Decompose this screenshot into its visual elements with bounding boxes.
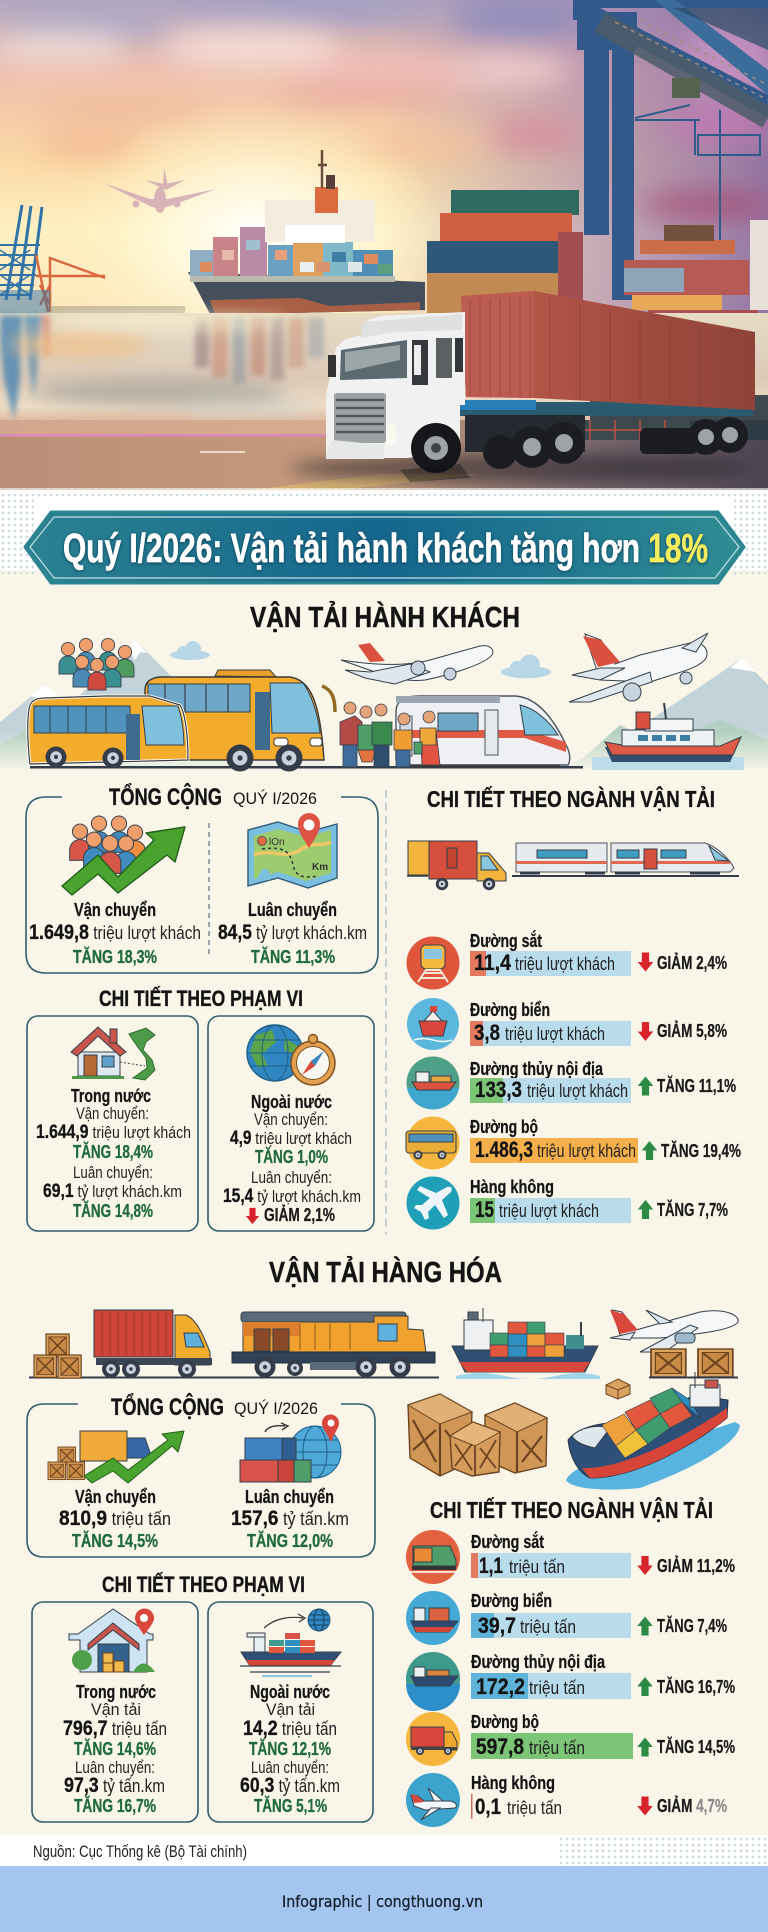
row: inland waterway: TĂNG 16,7% [657, 1676, 735, 1697]
row: aviation: 15 [475, 1197, 494, 1222]
icon: airplane large [569, 633, 708, 702]
row: rail [406, 1530, 735, 1584]
row: inland waterway: 133,3 [475, 1077, 522, 1102]
row: sea: TĂNG 7,4% [657, 1615, 727, 1636]
panel heading: TỔNG CỘNG [111, 1393, 224, 1421]
row: rail: GIẢM 11,2% [657, 1555, 735, 1576]
row: inland waterway: 172,2 [476, 1674, 525, 1699]
icon: passenger train [512, 843, 739, 877]
icon: big wooden crates [408, 1394, 547, 1476]
road [0, 420, 768, 490]
hero photo illustration: port, ship and container truck [0, 0, 768, 490]
row: road: Đường bộ [470, 1117, 538, 1137]
panel: international freight [208, 1602, 373, 1822]
gantry crane [573, 0, 768, 300]
panel heading: TỔNG CỘNG [109, 783, 222, 811]
icon: crates under plane [649, 1349, 738, 1378]
icon: large coach bus [145, 670, 335, 772]
stat: luân chuyển [231, 1487, 349, 1551]
title banner [25, 512, 744, 583]
row: aviation: triệu tấn [507, 1798, 562, 1818]
panel: domestic freight: TĂNG 16,7% [74, 1795, 156, 1816]
row: inland waterway [406, 1652, 735, 1711]
column divider [385, 790, 387, 1235]
panel: domestic freight: 97,3 tỷ tấn.km [64, 1774, 165, 1797]
truck shadow [290, 454, 750, 482]
row: road: triệu tấn [529, 1738, 585, 1758]
row: sea: 39,7 [478, 1613, 516, 1638]
icon: travellers [340, 702, 440, 767]
panel: international freight: TĂNG 5,1% [254, 1795, 327, 1816]
icon: ship and globe [240, 1609, 341, 1677]
panel: passenger totals [26, 783, 378, 973]
panel: freight totals [27, 1393, 375, 1557]
row: aviation: GIẢM 4,7% [657, 1795, 727, 1816]
mountains [0, 640, 768, 772]
panel: domestic freight: Trong nước [76, 1682, 156, 1702]
row: inland waterway: TĂNG 11,1% [657, 1075, 736, 1096]
icon: house and Vietnam map [71, 1027, 155, 1080]
row: aviation [406, 1773, 727, 1827]
panel: domestic freight [32, 1602, 198, 1822]
stacked containers [451, 190, 579, 215]
panel: international passengers: Luân chuyển: [251, 1168, 332, 1187]
panel heading [111, 1393, 318, 1421]
panel: international passengers: GIẢM 2,1% [264, 1204, 335, 1225]
row: aviation: TĂNG 7,7% [657, 1199, 728, 1220]
icon: map with pin: lOn [269, 837, 285, 848]
panel: international passengers: 4,9 triệu lượt khách [230, 1128, 352, 1149]
heading: by scope (passengers): CHI TIẾT THEO PHẠM VI [99, 986, 303, 1011]
stat: luân chuyển: TĂNG 12,0% [247, 1530, 333, 1551]
heading: freight transport: VẬN TẢI HÀNG HÓA [269, 1255, 502, 1289]
row: inland waterway: Đường thủy nội địa [470, 1059, 604, 1079]
cab [326, 312, 465, 458]
row: road: TĂNG 14,5% [657, 1736, 735, 1757]
water [0, 313, 768, 423]
stat: luân chuyển [218, 900, 367, 967]
icon: cargo plane [610, 1310, 738, 1352]
icon: globe and compass [247, 1025, 335, 1085]
icon: small box [606, 1379, 630, 1399]
row: road: triệu lượt khách [537, 1141, 636, 1161]
trailer container [461, 291, 755, 410]
panel: international freight: Luân chuyển: [251, 1758, 329, 1777]
row: rail: triệu tấn [509, 1557, 565, 1577]
panel: domestic passengers: TĂNG 18,4% [73, 1141, 153, 1162]
icon: locomotive [232, 1312, 435, 1378]
panel: domestic freight: Vận tải [91, 1700, 141, 1719]
icon: small coach bus [28, 696, 188, 768]
stat: vận chuyển [59, 1487, 171, 1551]
container ship [188, 272, 425, 314]
row: inland waterway [406, 1056, 736, 1110]
icon: cargo ship [452, 1308, 600, 1379]
row: sea: Đường biển [471, 1591, 552, 1611]
stat: luân chuyển: 157,6 tỷ tấn.km [231, 1507, 349, 1530]
panel: international passengers [208, 1016, 374, 1231]
stat: vận chuyển: Vận chuyển [74, 900, 156, 920]
distant plane [103, 168, 216, 213]
icon: truck, crates and rising arrow [48, 1431, 184, 1483]
panel: domestic passengers: 69,1 tỷ lượt khách.km [43, 1181, 182, 1202]
panel: domestic freight: TĂNG 14,6% [74, 1738, 156, 1759]
panel: domestic passengers: Trong nước [71, 1086, 151, 1106]
panel: domestic passengers: Luân chuyển: [73, 1163, 153, 1182]
row: rail: 1,1 [479, 1553, 503, 1578]
panel heading: QUÝ I/2026 [233, 789, 317, 808]
stat: vận chuyển: Vận chuyển [75, 1487, 156, 1507]
panel: domestic passengers: TĂNG 14,8% [73, 1200, 153, 1221]
panel: domestic passengers: 1.644,9 triệu lượt khách [36, 1122, 191, 1143]
icon: map with pin [248, 813, 337, 888]
panel: domestic passengers: Vận chuyển: [76, 1104, 149, 1123]
row: aviation: Hàng không [470, 1177, 554, 1197]
row: road: Đường bộ [471, 1712, 539, 1732]
row: rail: GIẢM 2,4% [657, 952, 727, 973]
row: road: TĂNG 19,4% [661, 1140, 741, 1161]
stat: vận chuyển [29, 900, 201, 967]
list: freight transport by mode [406, 1530, 735, 1827]
panel: international freight: TĂNG 12,1% [249, 1738, 331, 1759]
panel: domestic freight: Luân chuyển: [75, 1758, 155, 1777]
row: sea: triệu tấn [520, 1617, 576, 1637]
stat: vận chuyển: 1.649,8 triệu lượt khách [29, 921, 201, 944]
freight illustration [29, 1308, 740, 1490]
icon: people and rising arrow [62, 816, 185, 895]
panel: international freight: Vận tải [266, 1700, 315, 1719]
row: aviation: Hàng không [471, 1773, 555, 1793]
row: rail: Đường sắt [471, 1531, 544, 1552]
row: road: 1.486,3 [475, 1137, 533, 1162]
divider [208, 823, 210, 957]
stat: luân chuyển: TĂNG 11,3% [251, 946, 335, 967]
row: inland waterway: triệu tấn [529, 1678, 585, 1698]
stat: luân chuyển: Luân chuyển [245, 1487, 334, 1507]
icon: train [396, 696, 570, 766]
stat: vận chuyển: TĂNG 14,5% [72, 1530, 158, 1551]
source note: Nguồn: Cục Thống kê (Bộ Tài chính) [33, 1842, 247, 1861]
row: sea [407, 998, 727, 1050]
icon: warehouse with pin [69, 1609, 155, 1672]
stat: vận chuyển: 810,9 triệu tấn [59, 1507, 171, 1530]
icon: containers and globe [240, 1414, 341, 1482]
icon: passenger boat [592, 703, 744, 770]
row: aviation: triệu lượt khách [499, 1201, 599, 1221]
stat: vận chuyển: TĂNG 18,3% [73, 946, 157, 967]
row: rail: 11,4 [474, 950, 512, 975]
panel: international freight: Ngoài nước [250, 1682, 330, 1702]
panel: domestic passengers [27, 1016, 198, 1231]
row: rail [406, 930, 727, 990]
icon: group of people [59, 638, 134, 690]
icon: crates [34, 1334, 81, 1378]
right side containers [624, 225, 758, 334]
trailer chassis [458, 402, 753, 416]
icon: container truck [94, 1310, 212, 1378]
panel: international passengers: Ngoài nước [251, 1092, 332, 1112]
panel: international freight: 60,3 tỷ tấn.km [240, 1774, 340, 1797]
panel: international passengers: 15,4 tỷ lượt khách.km [223, 1186, 361, 1207]
row: inland waterway: triệu lượt khách [527, 1081, 628, 1101]
passenger transport illustration [0, 633, 768, 772]
panel: international passengers: Vận chuyển: [254, 1110, 328, 1129]
row: road: 597,8 [476, 1734, 524, 1759]
ground line [30, 766, 583, 768]
icon: isometric container ship [566, 1372, 740, 1490]
stat: luân chuyển: Luân chuyển [248, 900, 337, 920]
icon: delivery truck [407, 841, 506, 890]
panel heading [109, 783, 317, 811]
row: sea: triệu lượt khách [505, 1024, 605, 1044]
list: passenger transport by mode [406, 930, 741, 1230]
arrow down [246, 1208, 259, 1224]
footer text: Infographic | congthuong.vn [282, 1892, 483, 1911]
heading: passenger transport: VẬN TẢI HÀNH KHÁCH [250, 600, 520, 634]
row: rail: triệu lượt khách [515, 954, 615, 974]
row: aviation [406, 1176, 728, 1230]
left cranes [0, 205, 42, 300]
stat: luân chuyển: 84,5 tỷ lượt khách.km [218, 921, 367, 944]
row: sea [406, 1591, 727, 1645]
panel heading: QUÝ I/2026 [234, 1399, 318, 1418]
panel: domestic freight: 796,7 triệu tấn [63, 1717, 167, 1740]
row: road [406, 1712, 735, 1766]
row: rail: Đường sắt [470, 930, 542, 951]
row: aviation: 0,1 [475, 1794, 501, 1819]
icon: map with pin: Km [312, 862, 328, 873]
footer bar [0, 1866, 768, 1932]
icon: airplane small [341, 643, 493, 684]
row: inland waterway: Đường thủy nội địa [471, 1652, 606, 1672]
panel: international freight: 14,2 triệu tấn [243, 1717, 337, 1740]
truck wheels [483, 417, 748, 469]
panel: international passengers: TĂNG 1,0% [255, 1146, 328, 1167]
row: sea: GIẢM 5,8% [657, 1020, 727, 1041]
row: sea: Đường biển [470, 1000, 550, 1020]
row: sea: 3,8 [474, 1020, 500, 1045]
heading: by scope (freight): CHI TIẾT THEO PHẠM VI [102, 1572, 305, 1597]
row: road [406, 1116, 741, 1170]
